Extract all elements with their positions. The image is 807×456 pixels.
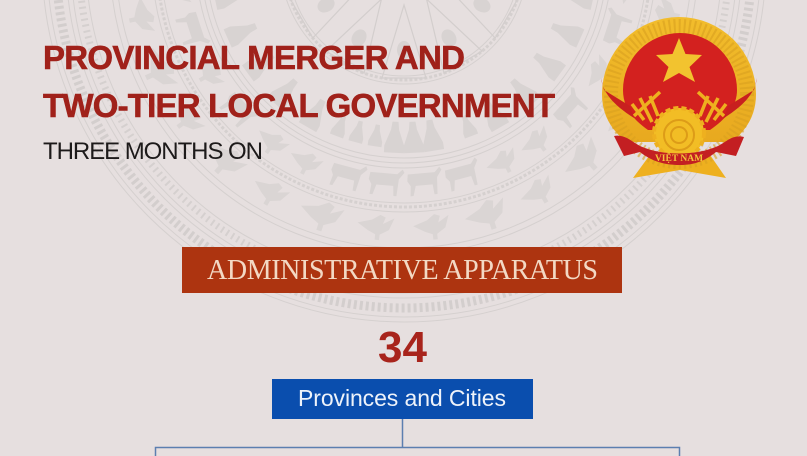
subtitle: THREE MONTHS ON (43, 138, 263, 165)
drum concentric rings (42, 0, 766, 322)
title (43, 39, 555, 165)
emblem banner (614, 136, 744, 165)
emblem base ribbon tails (633, 152, 726, 178)
emblem star (656, 38, 702, 82)
number: 34: 34 (378, 323, 427, 372)
icon: Vietnam national emblem (601, 17, 757, 178)
emblem gear (654, 108, 704, 158)
emblem red field (623, 33, 737, 130)
title line 1: PROVINCIAL MERGER AND (43, 39, 465, 76)
label box: provinces and cities: Provinces and Cities (298, 385, 506, 411)
emblem rice stalks (632, 92, 726, 122)
org chart connector lines (156, 419, 680, 456)
emblem banner label: VIỆT NAM (655, 151, 703, 164)
emblem wreath grain texture (611, 26, 747, 162)
drum animal band (167, 0, 641, 197)
bronze drum background pattern (42, 0, 766, 322)
section banner: administrative apparatus: ADMINISTRATIVE APPARATUS (207, 255, 598, 286)
label box: provinces and cities (272, 379, 533, 419)
title line 2: TWO-TIER LOCAL GOVERNMENT (43, 87, 555, 124)
drum human figure band (213, 0, 595, 153)
drum bird band (125, 0, 683, 242)
drum central rays (286, 0, 522, 78)
section banner: administrative apparatus (182, 247, 622, 293)
emblem side ribbons (601, 78, 757, 118)
emblem rice wreath (602, 17, 756, 142)
